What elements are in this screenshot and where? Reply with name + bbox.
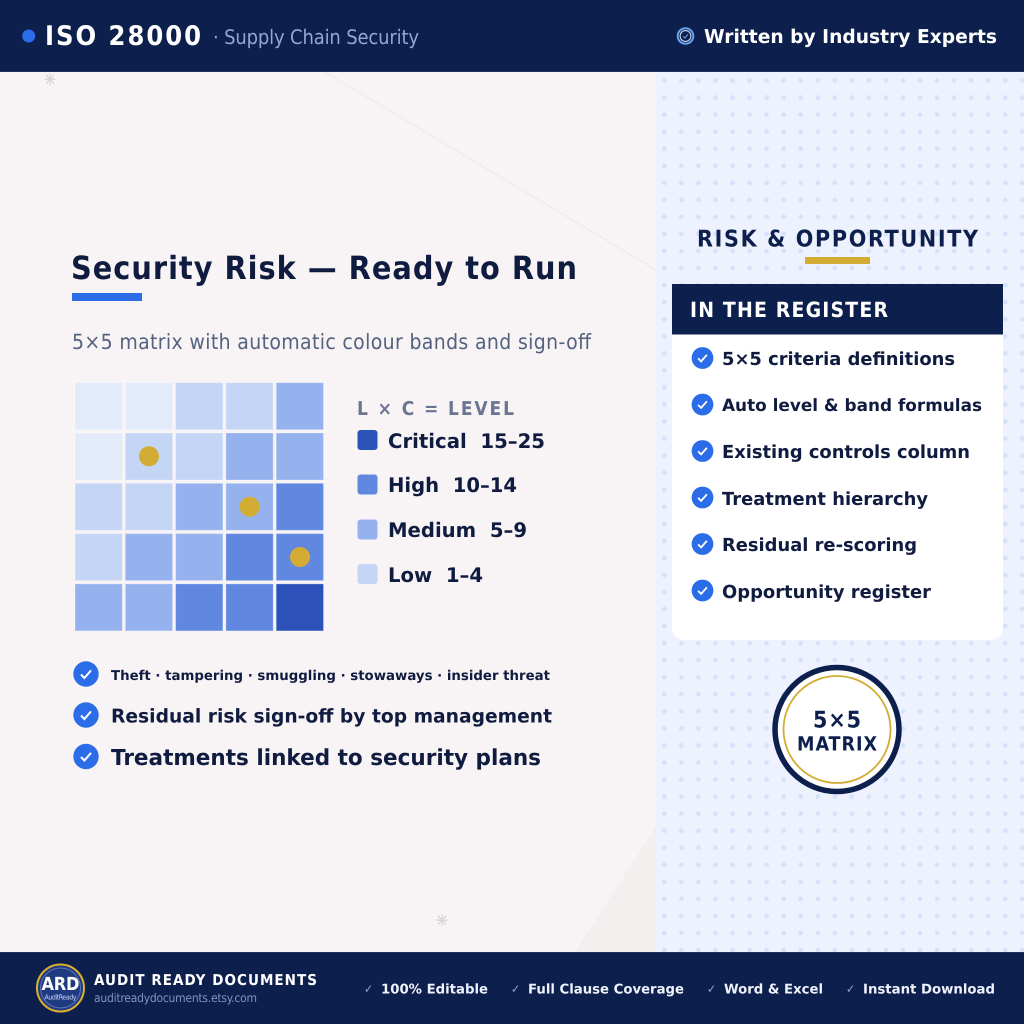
decorative asterisks: ✳	[436, 911, 448, 930]
footer brand name: AUDIT READY DOCUMENTS	[94, 971, 317, 989]
badge: 5x5 matrix	[775, 668, 899, 792]
footer logo	[37, 964, 84, 1012]
left background	[0, 72, 656, 952]
heading underline	[72, 293, 142, 301]
feature: instant download: ✓	[846, 982, 855, 996]
header subtitle: · Supply Chain Security	[213, 25, 419, 49]
header title: ISO 28000	[45, 21, 201, 52]
register item 3: Existing controls column	[722, 442, 970, 463]
check item: threats: Theft · tampering · smuggling · stowaways · insider threat	[111, 668, 551, 684]
decorative asterisks: ✳	[44, 70, 56, 89]
register item 4: Treatment hierarchy	[722, 489, 928, 510]
subheading: 5×5 matrix with automatic colour bands and sign-off	[72, 330, 592, 354]
legend: medium: Medium 5–9	[388, 518, 527, 542]
footer url: auditreadydocuments.etsy.com	[94, 991, 257, 1005]
icon: verified badge	[678, 28, 693, 44]
legend	[357, 398, 545, 587]
risk matrix heatmap	[75, 383, 324, 631]
panel: in the register	[672, 284, 1003, 640]
footer logo: AuditReady	[44, 994, 77, 1002]
header bar	[0, 0, 1024, 72]
check item: sign-off: Residual risk sign-off by top management	[111, 706, 552, 728]
footer bar	[0, 952, 1024, 1024]
header tagline: Written by Industry Experts	[704, 26, 997, 48]
feature: clause coverage: ✓	[511, 982, 520, 996]
feature: editable: 100% Editable	[381, 982, 488, 998]
legend title: L × C = LEVEL	[357, 398, 514, 420]
main heading: Security Risk — Ready to Run	[71, 249, 577, 287]
panel header text: IN THE REGISTER	[690, 298, 888, 322]
risk markers	[139, 446, 310, 567]
badge: 5x5 matrix: 5×5	[813, 708, 861, 734]
register item 6: Opportunity register	[722, 582, 931, 603]
check item: threats	[73, 661, 551, 687]
register item 5: Residual re-scoring	[722, 535, 917, 556]
left checklist	[73, 661, 552, 771]
check item: treatments: Treatments linked to security plans	[111, 746, 541, 771]
feature: editable: ✓	[364, 982, 373, 996]
header status dot	[22, 30, 35, 42]
feature: word and excel: Word & Excel	[724, 982, 823, 998]
legend: low: Low 1–4	[388, 563, 483, 587]
footer logo: ARD	[42, 974, 80, 995]
legend: high: High 10–14	[388, 473, 517, 497]
register item 1: 5×5 criteria definitions	[722, 349, 955, 370]
feature: word and excel: ✓	[707, 982, 716, 996]
decorative asterisks	[44, 70, 448, 930]
feature: clause coverage: Full Clause Coverage	[528, 982, 684, 998]
feature: instant download: Instant Download	[863, 982, 995, 998]
badge: 5x5 matrix: MATRIX	[797, 732, 877, 756]
register item 2: Auto level & band formulas	[722, 396, 982, 416]
right heading underline	[805, 257, 870, 264]
legend: critical: Critical 15–25	[388, 429, 545, 453]
right dotted background	[656, 72, 1024, 952]
right panel heading: RISK & OPPORTUNITY	[697, 226, 979, 252]
